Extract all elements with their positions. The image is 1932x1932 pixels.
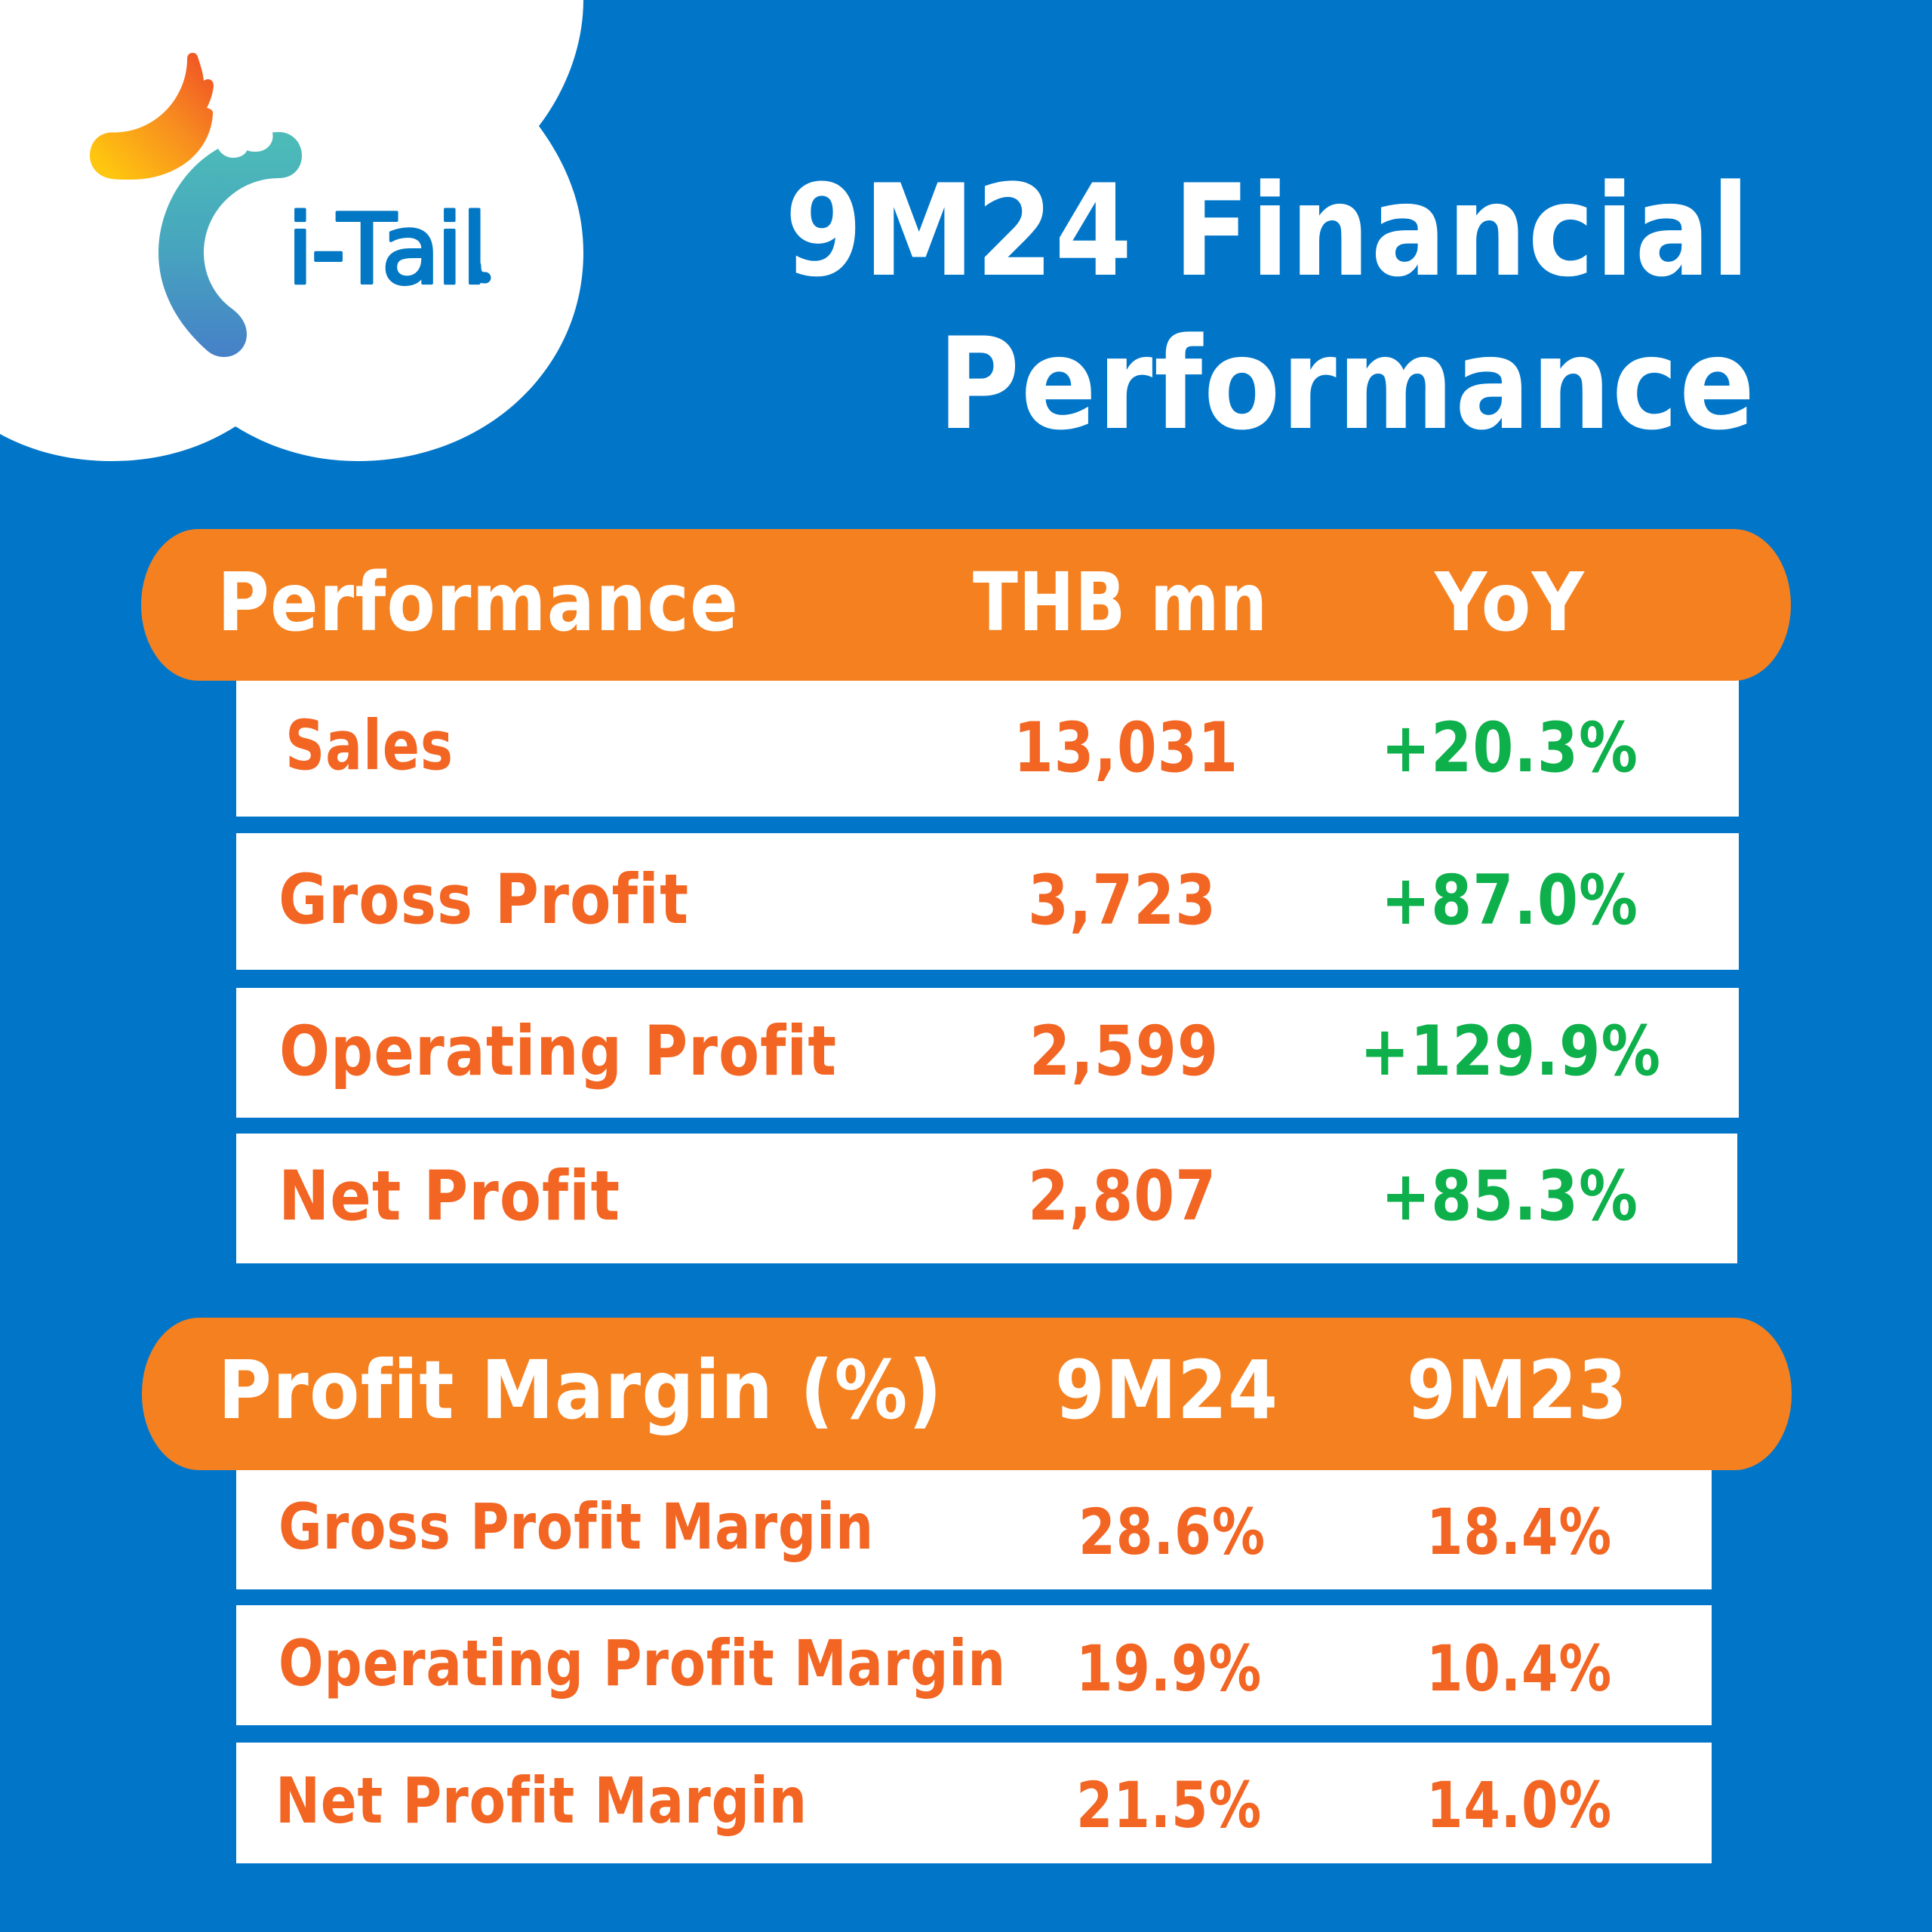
header labels: Performance	[217, 556, 739, 650]
table rows background	[236, 1464, 1712, 1863]
row: sales: Sales	[285, 706, 454, 786]
title line 2: Performance	[938, 310, 1756, 458]
row: net profit: 2,807	[1028, 1157, 1217, 1236]
header labels: 9M23	[1407, 1344, 1628, 1438]
header labels: Profit Margin (%)	[218, 1344, 943, 1438]
row: operating profit margin: Operating Profit Margin	[278, 1626, 1006, 1700]
panel: performance table	[141, 529, 1791, 1263]
icon: wing	[90, 53, 214, 180]
row: operating profit margin: 19.9%	[1076, 1632, 1262, 1706]
header labels: THB mn	[973, 556, 1268, 650]
row: sales: +20.3%	[1381, 709, 1638, 788]
logo: i-Tail	[90, 53, 488, 357]
header bar	[142, 1318, 1792, 1470]
row: net profit margin: 14.0%	[1426, 1768, 1612, 1842]
row: net profit: Net Profit	[278, 1157, 620, 1236]
row: operating profit: 2,599	[1029, 1012, 1219, 1091]
row: gross profit margin: 18.4%	[1426, 1495, 1612, 1569]
row: sales	[285, 706, 1638, 788]
row: gross profit: +87.0%	[1381, 861, 1638, 940]
header labels: 9M24	[1055, 1344, 1278, 1438]
row: net profit margin: Net Profit Margin	[275, 1764, 808, 1838]
header labels: YoY	[1433, 556, 1585, 650]
title	[785, 157, 1756, 458]
row: net profit margin	[275, 1764, 1612, 1842]
icon: tail	[158, 132, 302, 357]
row: gross profit margin: Gross Profit Margin	[278, 1490, 874, 1564]
row: gross profit: Gross Profit	[278, 860, 689, 940]
row: operating profit: Operating Profit	[279, 1012, 837, 1091]
row: gross profit margin	[278, 1490, 1612, 1569]
header labels	[217, 556, 1585, 650]
row: operating profit	[279, 1012, 1661, 1091]
wordmark: i-Tail	[287, 194, 488, 306]
row: sales: 13,031	[1014, 709, 1238, 788]
header bar	[141, 529, 1791, 681]
row: gross profit	[278, 860, 1638, 940]
row: operating profit margin: 10.4%	[1426, 1632, 1612, 1706]
row: operating profit: +129.9%	[1360, 1012, 1661, 1091]
row: net profit margin: 21.5%	[1076, 1768, 1262, 1842]
row: net profit	[278, 1157, 1638, 1236]
white cloud logo panel	[0, 0, 583, 461]
header labels	[218, 1344, 1628, 1438]
table rows background	[236, 675, 1739, 1263]
row: net profit: +85.3%	[1381, 1157, 1638, 1236]
row: gross profit margin: 28.6%	[1078, 1495, 1266, 1569]
wordmark tail of letter l	[475, 266, 485, 278]
row: gross profit: 3,723	[1028, 861, 1217, 940]
title line 1: 9M24 Financial	[785, 157, 1751, 305]
row: operating profit margin	[278, 1626, 1612, 1706]
panel: profit margin table	[142, 1318, 1792, 1863]
